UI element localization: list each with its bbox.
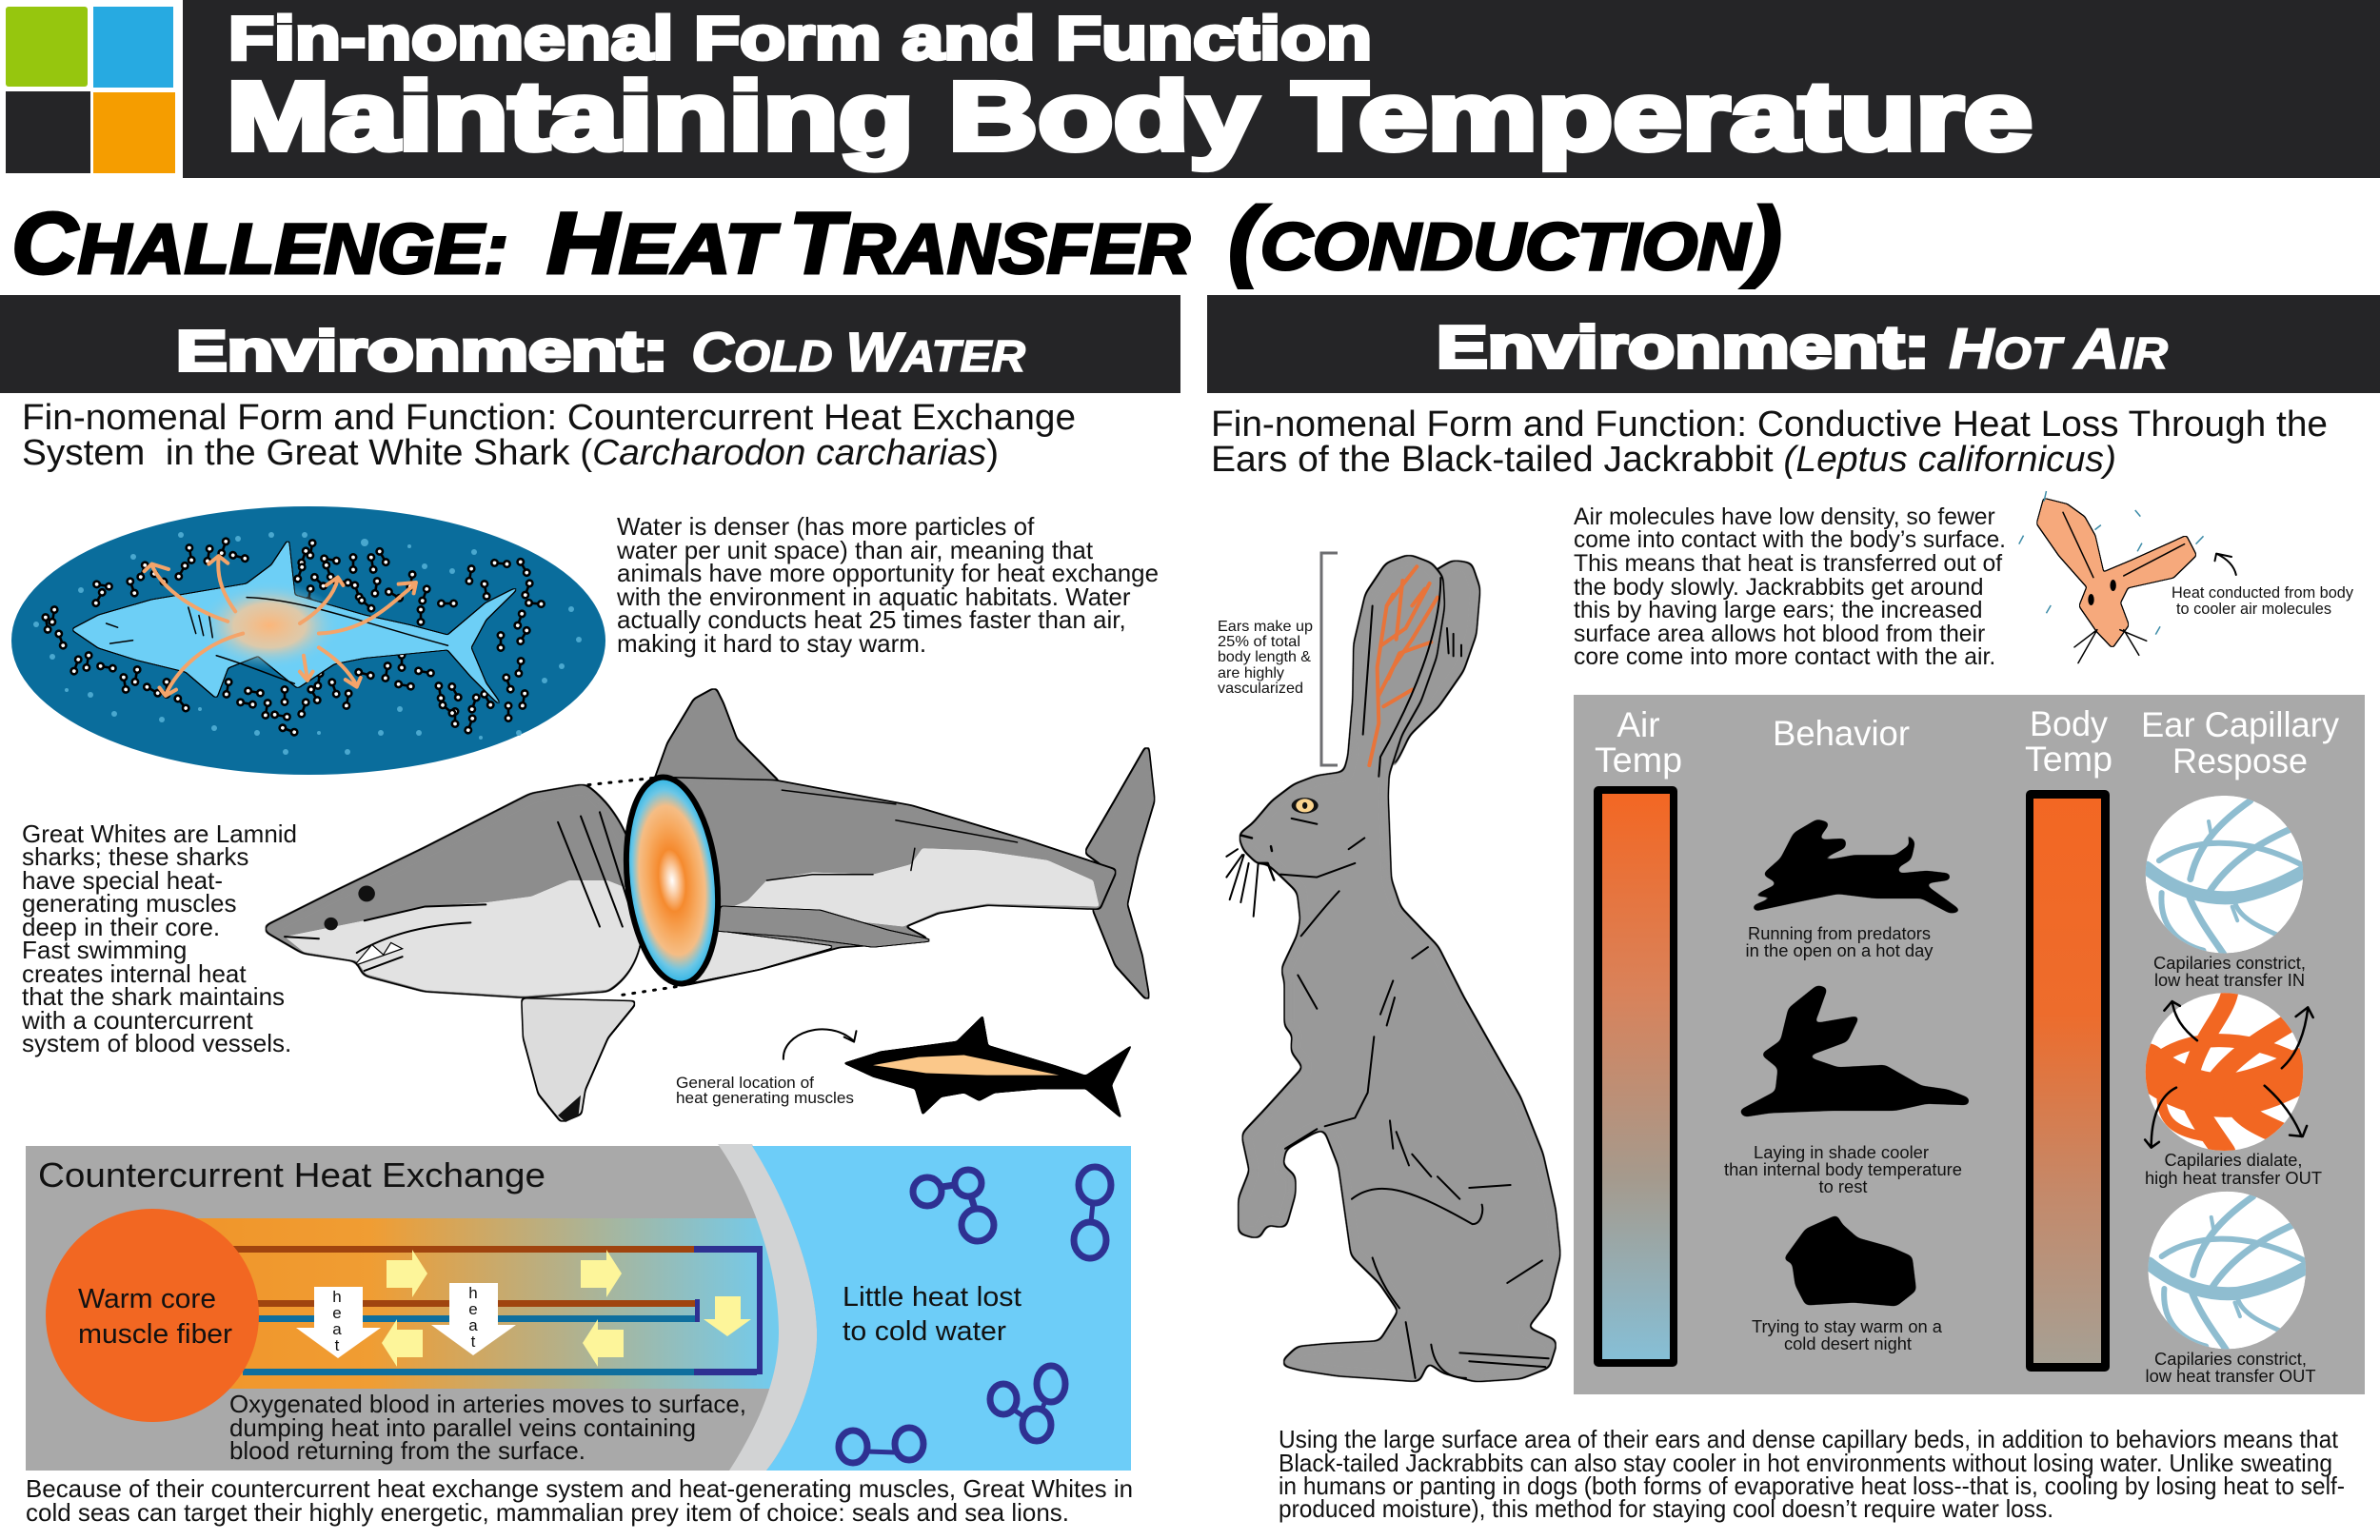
front white belly bbox=[285, 880, 642, 997]
right environment banner: hot air: HOT AIR bbox=[1949, 317, 2168, 381]
arteries and veins bbox=[233, 1246, 760, 1375]
capillary captions: high heat transfer OUT bbox=[2145, 1169, 2322, 1188]
behavior silhouettes bbox=[1738, 819, 1970, 1306]
text: air molecules: the body slowly. Jackrabbits get around bbox=[1574, 575, 1983, 601]
pectoral fin bbox=[523, 998, 636, 1121]
white heat arrows bbox=[296, 1283, 516, 1358]
white heat arrows: a bbox=[468, 1316, 478, 1334]
text: air molecules: surface area allows hot blood from their bbox=[1574, 622, 1985, 647]
right conclusion text: Black-tailed Jackrabbits can also stay cooler in hot environments without losing water. Unlike sweating bbox=[1279, 1449, 2332, 1477]
curved skin band bbox=[718, 1144, 817, 1471]
capillary captions: Capilaries dialate, bbox=[2165, 1151, 2302, 1170]
labels: Warm core bbox=[78, 1284, 216, 1314]
challenge heading bbox=[11, 188, 1782, 292]
behavior captions: Trying to stay warm on a bbox=[1752, 1317, 1943, 1336]
heat arrows bbox=[145, 556, 416, 696]
behavior captions: in the open on a hot day bbox=[1746, 941, 1933, 960]
left subheading bbox=[22, 398, 1076, 473]
text: lamnid sharks: Great Whites are Lamnid bbox=[22, 819, 297, 848]
left conclusion text bbox=[26, 1474, 1133, 1527]
ear annotation: 25% of total bbox=[1218, 634, 1300, 650]
right conclusion text: in humans or panting in dogs (both forms of evaporative heat loss--that is, cooling by losing heat to self- bbox=[1279, 1471, 2345, 1500]
series title: Fin-nomenal Form and Function bbox=[228, 4, 1372, 72]
right subheading: Ears of the Black-tailed Jackrabbit (Leptus californicus) bbox=[1211, 440, 2116, 480]
white heat arrows: a bbox=[332, 1320, 342, 1338]
column headers: Air bbox=[1616, 705, 1660, 744]
text: air molecules: core come into more contact with the air. bbox=[1574, 644, 1995, 670]
ear and fur lines bbox=[1280, 578, 1549, 1378]
text: lamnid sharks: creates internal heat bbox=[22, 959, 247, 988]
capillary captions bbox=[2145, 954, 2322, 1386]
right conclusion text: produced moisture), this method for staying cool doesn’t require water loss. bbox=[1279, 1494, 2053, 1523]
text: air molecules: This means that heat is transferred out of bbox=[1574, 551, 2002, 577]
cut cross-section disc bbox=[617, 773, 727, 988]
small shark: muscle location bbox=[676, 1015, 1133, 1119]
white heat arrows: e bbox=[468, 1300, 478, 1318]
heat-out arrows bbox=[2145, 1001, 2313, 1148]
countercurrent heat exchange diagram bbox=[26, 1144, 1131, 1471]
behavior captions: to rest bbox=[1818, 1177, 1868, 1196]
capillary captions: low heat transfer OUT bbox=[2146, 1367, 2316, 1386]
column headers: Respose bbox=[2172, 741, 2308, 780]
text: air molecules: Air molecules have low density, so fewer bbox=[1574, 504, 1995, 530]
labels: to cold water bbox=[843, 1316, 1006, 1347]
text: lamnid sharks: with a countercurrent bbox=[21, 1006, 254, 1035]
oval: shark in cold water with molecules bbox=[11, 506, 605, 775]
column headers: Temp bbox=[2025, 740, 2112, 779]
column headers: Ear Capillary bbox=[2141, 705, 2339, 744]
warm core circle bbox=[46, 1209, 259, 1422]
white heat arrows: h bbox=[332, 1288, 342, 1306]
text: lamnid sharks: that the shark maintains bbox=[22, 982, 285, 1011]
left subheading: System in the Great White Shark ( Carcharodon carcharias) bbox=[22, 433, 999, 473]
text: air molecules bbox=[1574, 504, 2006, 670]
white heat arrows: h bbox=[468, 1284, 478, 1302]
rear body bbox=[668, 778, 1116, 985]
blood flow note: Oxygenated blood in arteries moves to surface, bbox=[229, 1390, 746, 1418]
right subheading bbox=[1211, 405, 2328, 480]
warm gradient band bbox=[190, 1218, 790, 1389]
right conclusion text: Using the large surface area of their ears and dense capillary beds, in addition to behaviors means that bbox=[1279, 1425, 2339, 1453]
text: lamnid sharks: Fast swimming bbox=[22, 936, 187, 964]
lower rear belly bbox=[684, 931, 835, 984]
back ear bbox=[1387, 561, 1479, 780]
capillary circles bbox=[2145, 796, 2313, 1351]
left environment banner: cold water: Environment: bbox=[176, 320, 668, 383]
dorsal fin bbox=[654, 688, 781, 784]
text: water density: with the environment in aquatic habitats. Water bbox=[616, 582, 1131, 611]
water molecules bbox=[839, 1167, 1111, 1463]
title: Countercurrent Heat Exchange bbox=[38, 1155, 545, 1194]
capillary captions: low heat transfer IN bbox=[2154, 971, 2305, 990]
column headers bbox=[1595, 704, 2339, 780]
shark in oval bbox=[72, 540, 519, 710]
yellow heat flow arrows bbox=[382, 1250, 751, 1367]
rear pectoral bbox=[718, 906, 934, 947]
body bbox=[1240, 556, 1559, 1381]
behavior captions: cold desert night bbox=[1784, 1334, 1912, 1353]
challenge heading: HEAT bbox=[546, 195, 781, 292]
challenge heading: TRANSFER bbox=[789, 195, 1190, 292]
text: water density: water per unit space) than air, meaning that bbox=[616, 536, 1094, 564]
text: water density: making it hard to stay warm. bbox=[617, 629, 926, 658]
challenge heading: (CONDUCTION ) bbox=[1228, 188, 1782, 288]
small shark: muscle location: heat generating muscles bbox=[676, 1090, 854, 1107]
white heat arrows: t bbox=[471, 1333, 476, 1351]
ear annotation: are highly bbox=[1218, 665, 1284, 681]
shark details bbox=[285, 778, 1018, 1122]
small orange rabbit with heat conduction bbox=[2019, 491, 2354, 663]
caption: Heat conducted from body bbox=[2172, 584, 2354, 602]
left environment banner: cold water bbox=[0, 295, 1180, 393]
text: lamnid sharks: deep in their core. bbox=[22, 913, 220, 941]
column headers: Temp bbox=[1595, 740, 1682, 780]
right conclusion text bbox=[1279, 1425, 2345, 1523]
molecules around shark bbox=[42, 538, 545, 736]
right environment banner: hot air bbox=[1207, 295, 2380, 393]
text: lamnid sharks: sharks; these sharks bbox=[22, 842, 248, 871]
column headers: Behavior bbox=[1773, 714, 1910, 753]
left subheading: Fin-nomenal Form and Function: Countercurrent Heat Exchange bbox=[22, 398, 1076, 438]
labels bbox=[78, 1282, 1021, 1350]
behavior captions: than internal body temperature bbox=[1724, 1160, 1962, 1179]
blood flow note: blood returning from the surface. bbox=[229, 1436, 585, 1465]
capillary captions: Capilaries constrict, bbox=[2154, 1350, 2307, 1369]
text: air molecules: come into contact with the body’s surface. bbox=[1574, 527, 2006, 553]
ear annotation: body length & bbox=[1218, 649, 1311, 665]
text: water density: actually conducts heat 25 times faster than air, bbox=[617, 605, 1126, 634]
front body bbox=[262, 785, 642, 997]
behavior captions: Running from predators bbox=[1748, 924, 1931, 943]
white heat arrows: e bbox=[332, 1304, 342, 1322]
ear annotation: Ears make up bbox=[1218, 619, 1313, 635]
temperature and behavior panel bbox=[1574, 695, 2365, 1394]
text: air molecules: this by having large ears; the increased bbox=[1574, 598, 1983, 623]
title banner bbox=[183, 0, 2380, 178]
great white shark cross-section bbox=[262, 688, 1154, 1122]
left conclusion text: cold seas can target their highly energetic, mammalian prey item of choice: seals and sea lions. bbox=[26, 1498, 1069, 1527]
left environment banner: cold water: COLD WATER bbox=[691, 322, 1025, 384]
main title: Maintaining Body Temperature bbox=[227, 62, 2033, 170]
eye bbox=[1292, 798, 1319, 814]
body temperature bar bbox=[2026, 790, 2110, 1372]
text: water density: Water is denser (has more particles of bbox=[617, 512, 1035, 541]
behavior captions bbox=[1724, 924, 1962, 1353]
jackrabbit illustration bbox=[1226, 556, 1559, 1381]
dilated capillaries bbox=[2146, 993, 2303, 1153]
right environment banner: hot air: Environment: bbox=[1437, 315, 1930, 381]
text: water density bbox=[616, 512, 1159, 658]
ear annotation: vascularized bbox=[1218, 681, 1303, 697]
text: lamnid sharks: have special heat- bbox=[22, 866, 223, 895]
labels: muscle fiber bbox=[78, 1319, 232, 1350]
right subheading: Fin-nomenal Form and Function: Conductive Heat Loss Through the bbox=[1211, 405, 2328, 444]
tail fin bbox=[1085, 744, 1154, 1001]
rear white belly bbox=[729, 848, 1100, 927]
blood flow note bbox=[229, 1390, 746, 1465]
column headers: Body bbox=[2030, 704, 2108, 743]
text: lamnid sharks: generating muscles bbox=[22, 889, 236, 918]
left conclusion text: Because of their countercurrent heat exchange system and heat-generating muscles, Great Whites in bbox=[26, 1474, 1133, 1503]
small orange rabbit with heat conduction: to cooler air molecules bbox=[2176, 601, 2331, 618]
curved arrow bbox=[783, 1029, 856, 1059]
air particles bbox=[2019, 491, 2204, 635]
cold water region bbox=[752, 1146, 1131, 1471]
challenge heading: CHALLENGE: bbox=[11, 195, 508, 292]
text: water density: animals have more opportunity for heat exchange bbox=[617, 559, 1159, 587]
ear veins bbox=[1369, 566, 1438, 765]
labels: Little heat lost bbox=[843, 1282, 1021, 1313]
ear annotation bbox=[1218, 553, 1338, 765]
conduction arrow bbox=[2214, 554, 2236, 575]
behavior captions: Laying in shade cooler bbox=[1754, 1143, 1929, 1162]
text: lamnid sharks bbox=[21, 819, 297, 1057]
caption: General location of bbox=[676, 1075, 814, 1092]
blood flow note: dumping heat into parallel veins containing bbox=[229, 1413, 696, 1442]
white heat arrows: t bbox=[335, 1336, 340, 1354]
capillary captions: Capilaries constrict, bbox=[2153, 954, 2306, 973]
whiskers bbox=[1226, 849, 1259, 917]
air temperature bar bbox=[1594, 786, 1677, 1367]
text: lamnid sharks: system of blood vessels. bbox=[22, 1029, 291, 1057]
logo squares bbox=[6, 7, 175, 173]
